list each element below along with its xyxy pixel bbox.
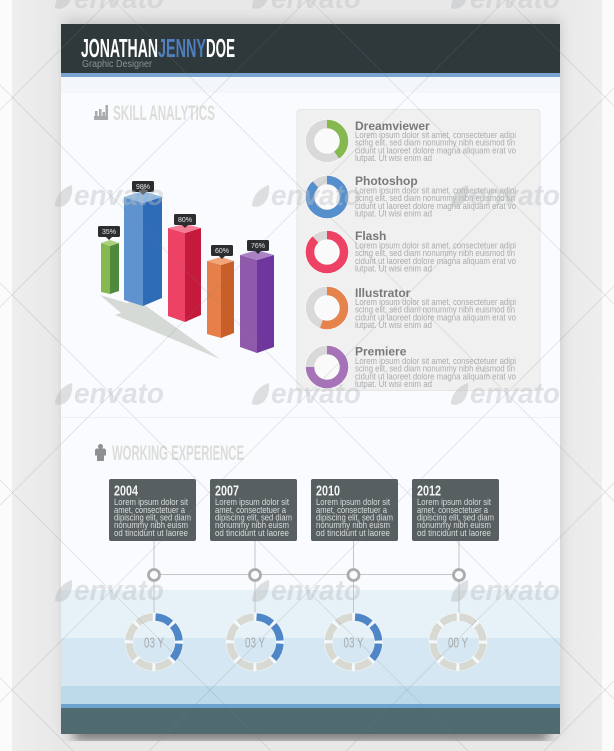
footer band	[61, 704, 560, 734]
card: 2004: od tincidunt ut laoree	[114, 528, 188, 538]
bar: purple 76%: 76%	[251, 243, 265, 250]
name: JENNY	[158, 33, 206, 63]
skill: Dreamviewer	[305, 119, 516, 163]
duration ring: 2010: 03 Y	[344, 634, 364, 652]
watermark: envato row 4	[55, 575, 560, 607]
watermark: envato row 4: envato	[74, 575, 164, 607]
card: 2012: amet, consectetuer a	[417, 505, 489, 515]
job title: Graphic Designer	[82, 58, 152, 70]
bar: orange 60%: 60%	[215, 248, 229, 255]
card: 2004	[109, 479, 196, 541]
skill: Dreamviewer: scing elit, sed diam nonummy nibh euismod tin	[355, 138, 515, 148]
card: 2012: od tincidunt ut laoree	[417, 528, 491, 538]
heading: working experience	[95, 442, 244, 465]
skill: Flash	[305, 229, 516, 274]
skill: Illustrator: cidunt ut laoreet dolore magna aliquam erat vo	[355, 312, 516, 322]
panel: software skills	[297, 110, 540, 390]
skill: Dreamviewer: Dreamviewer	[355, 119, 430, 133]
watermark: envato row 3: envato	[271, 378, 361, 410]
header band	[61, 24, 560, 77]
card: 2007: od tincidunt ut laoree	[215, 528, 289, 538]
skill: Illustrator: Illustrator	[355, 286, 411, 300]
duration ring: 2004	[128, 616, 180, 668]
card: 2004: dipiscing elit, sed diam	[114, 512, 191, 522]
card: 2007	[210, 479, 297, 541]
card: 2004: 2004	[114, 482, 138, 500]
3D bar chart	[98, 181, 274, 359]
skill: Photoshop: cidunt ut laoreet dolore magna aliquam erat vo	[355, 201, 516, 211]
name: DOE	[206, 33, 235, 63]
skill: Flash: Lorem ipsum dolor sit amet, consectetuer adipi	[355, 240, 516, 250]
bar: blue 98%: 98%	[136, 184, 150, 191]
card: 2007: dipiscing elit, sed diam	[215, 512, 292, 522]
card: 2004: Lorem ipsum dolor sit	[114, 497, 188, 507]
card: 2012: Lorem ipsum dolor sit	[417, 497, 491, 507]
watermark: envato row 2	[55, 180, 560, 212]
skill: Dreamviewer: cidunt ut laoreet dolore magna aliquam erat vo	[355, 145, 516, 155]
card: 2004: amet, consectetuer a	[114, 505, 186, 515]
card: 2010	[311, 479, 398, 541]
timeline connectors	[154, 541, 459, 614]
skill: Flash: scing elit, sed diam nonummy nibh euismod tin	[355, 248, 515, 258]
skill: Photoshop: scing elit, sed diam nonummy nibh euismod tin	[355, 193, 515, 203]
duration ring: 2004: 03 Y	[144, 634, 164, 652]
skill: Premiere: cidunt ut laoreet dolore magna aliquam erat vo	[355, 371, 516, 381]
bar: purple 76%	[240, 240, 274, 353]
skill: Dreamviewer: Lorem ipsum dolor sit amet, consectetuer adipi	[355, 130, 516, 140]
card: 2010: dipiscing elit, sed diam	[316, 512, 393, 522]
heading: working experience: WORKING EXPERIENCE	[112, 442, 244, 465]
heading: skill analytics: SKILL ANALYTICS	[113, 102, 215, 125]
bar: green 35%: 35%	[102, 229, 116, 236]
bar: red 80%	[168, 214, 201, 322]
card: 2010: Lorem ipsum dolor sit	[316, 497, 390, 507]
card: 2012	[412, 479, 499, 541]
skill: Photoshop: lutpat. Ut wisi enim ad	[355, 208, 432, 218]
name: JONATHAN	[81, 33, 158, 63]
card: 2007: amet, consectetuer a	[215, 505, 287, 515]
card: 2010: od tincidunt ut laoree	[316, 528, 390, 538]
card: 2007: nonummy nibh euism	[215, 520, 289, 530]
card: 2010: 2010	[316, 482, 340, 500]
duration ring: 2012: 00 Y	[448, 634, 468, 652]
card: 2007: Lorem ipsum dolor sit	[215, 497, 289, 507]
card: 2010: nonummy nibh euism	[316, 520, 390, 530]
skill: Photoshop: Lorem ipsum dolor sit amet, consectetuer adipi	[355, 186, 516, 196]
card: 2007: 2007	[215, 482, 239, 500]
watermark: envato row 3: envato	[74, 378, 164, 410]
icon: bar chart	[94, 105, 108, 120]
bar: green 35%	[98, 226, 120, 294]
skill: Illustrator	[305, 286, 516, 330]
card: 2010: amet, consectetuer a	[316, 505, 388, 515]
card: 2004: nonummy nibh euism	[114, 520, 188, 530]
bar: red 80%: 80%	[178, 217, 192, 224]
skill: Flash: lutpat. Ut wisi enim ad	[355, 264, 432, 274]
skill: Illustrator: lutpat. Ut wisi enim ad	[355, 320, 432, 330]
skill: Photoshop: Photoshop	[355, 174, 418, 188]
bar shadow	[100, 295, 220, 359]
duration ring: 2007	[229, 616, 281, 668]
card: 2012: 2012	[417, 482, 441, 500]
bar: orange 60%	[207, 245, 234, 338]
watermark: envato row 4: envato	[271, 575, 361, 607]
card: 2012: nonummy nibh euism	[417, 520, 491, 530]
timeline nodes	[148, 570, 464, 580]
duration ring: 2010	[327, 616, 380, 668]
watermark: envato row 3: envato	[470, 378, 560, 410]
skill: Dreamviewer: lutpat. Ut wisi enim ad	[355, 153, 432, 163]
page sheet	[61, 77, 560, 704]
watermark: envato row 2: envato	[271, 180, 361, 212]
skill: Premiere	[305, 344, 516, 389]
duration ring: 2007: 03 Y	[245, 634, 265, 652]
watermark: envato row 1	[55, 0, 560, 15]
skill: Illustrator: Lorem ipsum dolor sit amet, consectetuer adipi	[355, 297, 516, 307]
skill: Illustrator: scing elit, sed diam nonummy nibh euismod tin	[355, 305, 515, 315]
watermark: envato row 2: envato	[74, 180, 164, 212]
watermark: envato row 2: envato	[470, 180, 560, 212]
watermark: envato row 3	[55, 378, 560, 410]
skill: Photoshop	[305, 174, 516, 219]
icon: person	[95, 444, 106, 461]
skill: Flash: Flash	[355, 229, 386, 243]
card: 2012: dipiscing elit, sed diam	[417, 512, 494, 522]
skill: Premiere: Premiere	[355, 344, 407, 358]
bar: blue 98%	[124, 181, 162, 306]
skill: Premiere: scing elit, sed diam nonummy nibh euismod tin	[355, 364, 515, 374]
skill: Premiere: Lorem ipsum dolor sit amet, consectetuer adipi	[355, 356, 516, 366]
skill: Flash: cidunt ut laoreet dolore magna aliquam erat vo	[355, 256, 516, 266]
duration ring: 2012	[432, 616, 484, 668]
skill: Premiere: lutpat. Ut wisi enim ad	[355, 379, 432, 389]
watermark: envato row 4: envato	[470, 575, 560, 607]
heading: skill analytics	[94, 102, 215, 125]
